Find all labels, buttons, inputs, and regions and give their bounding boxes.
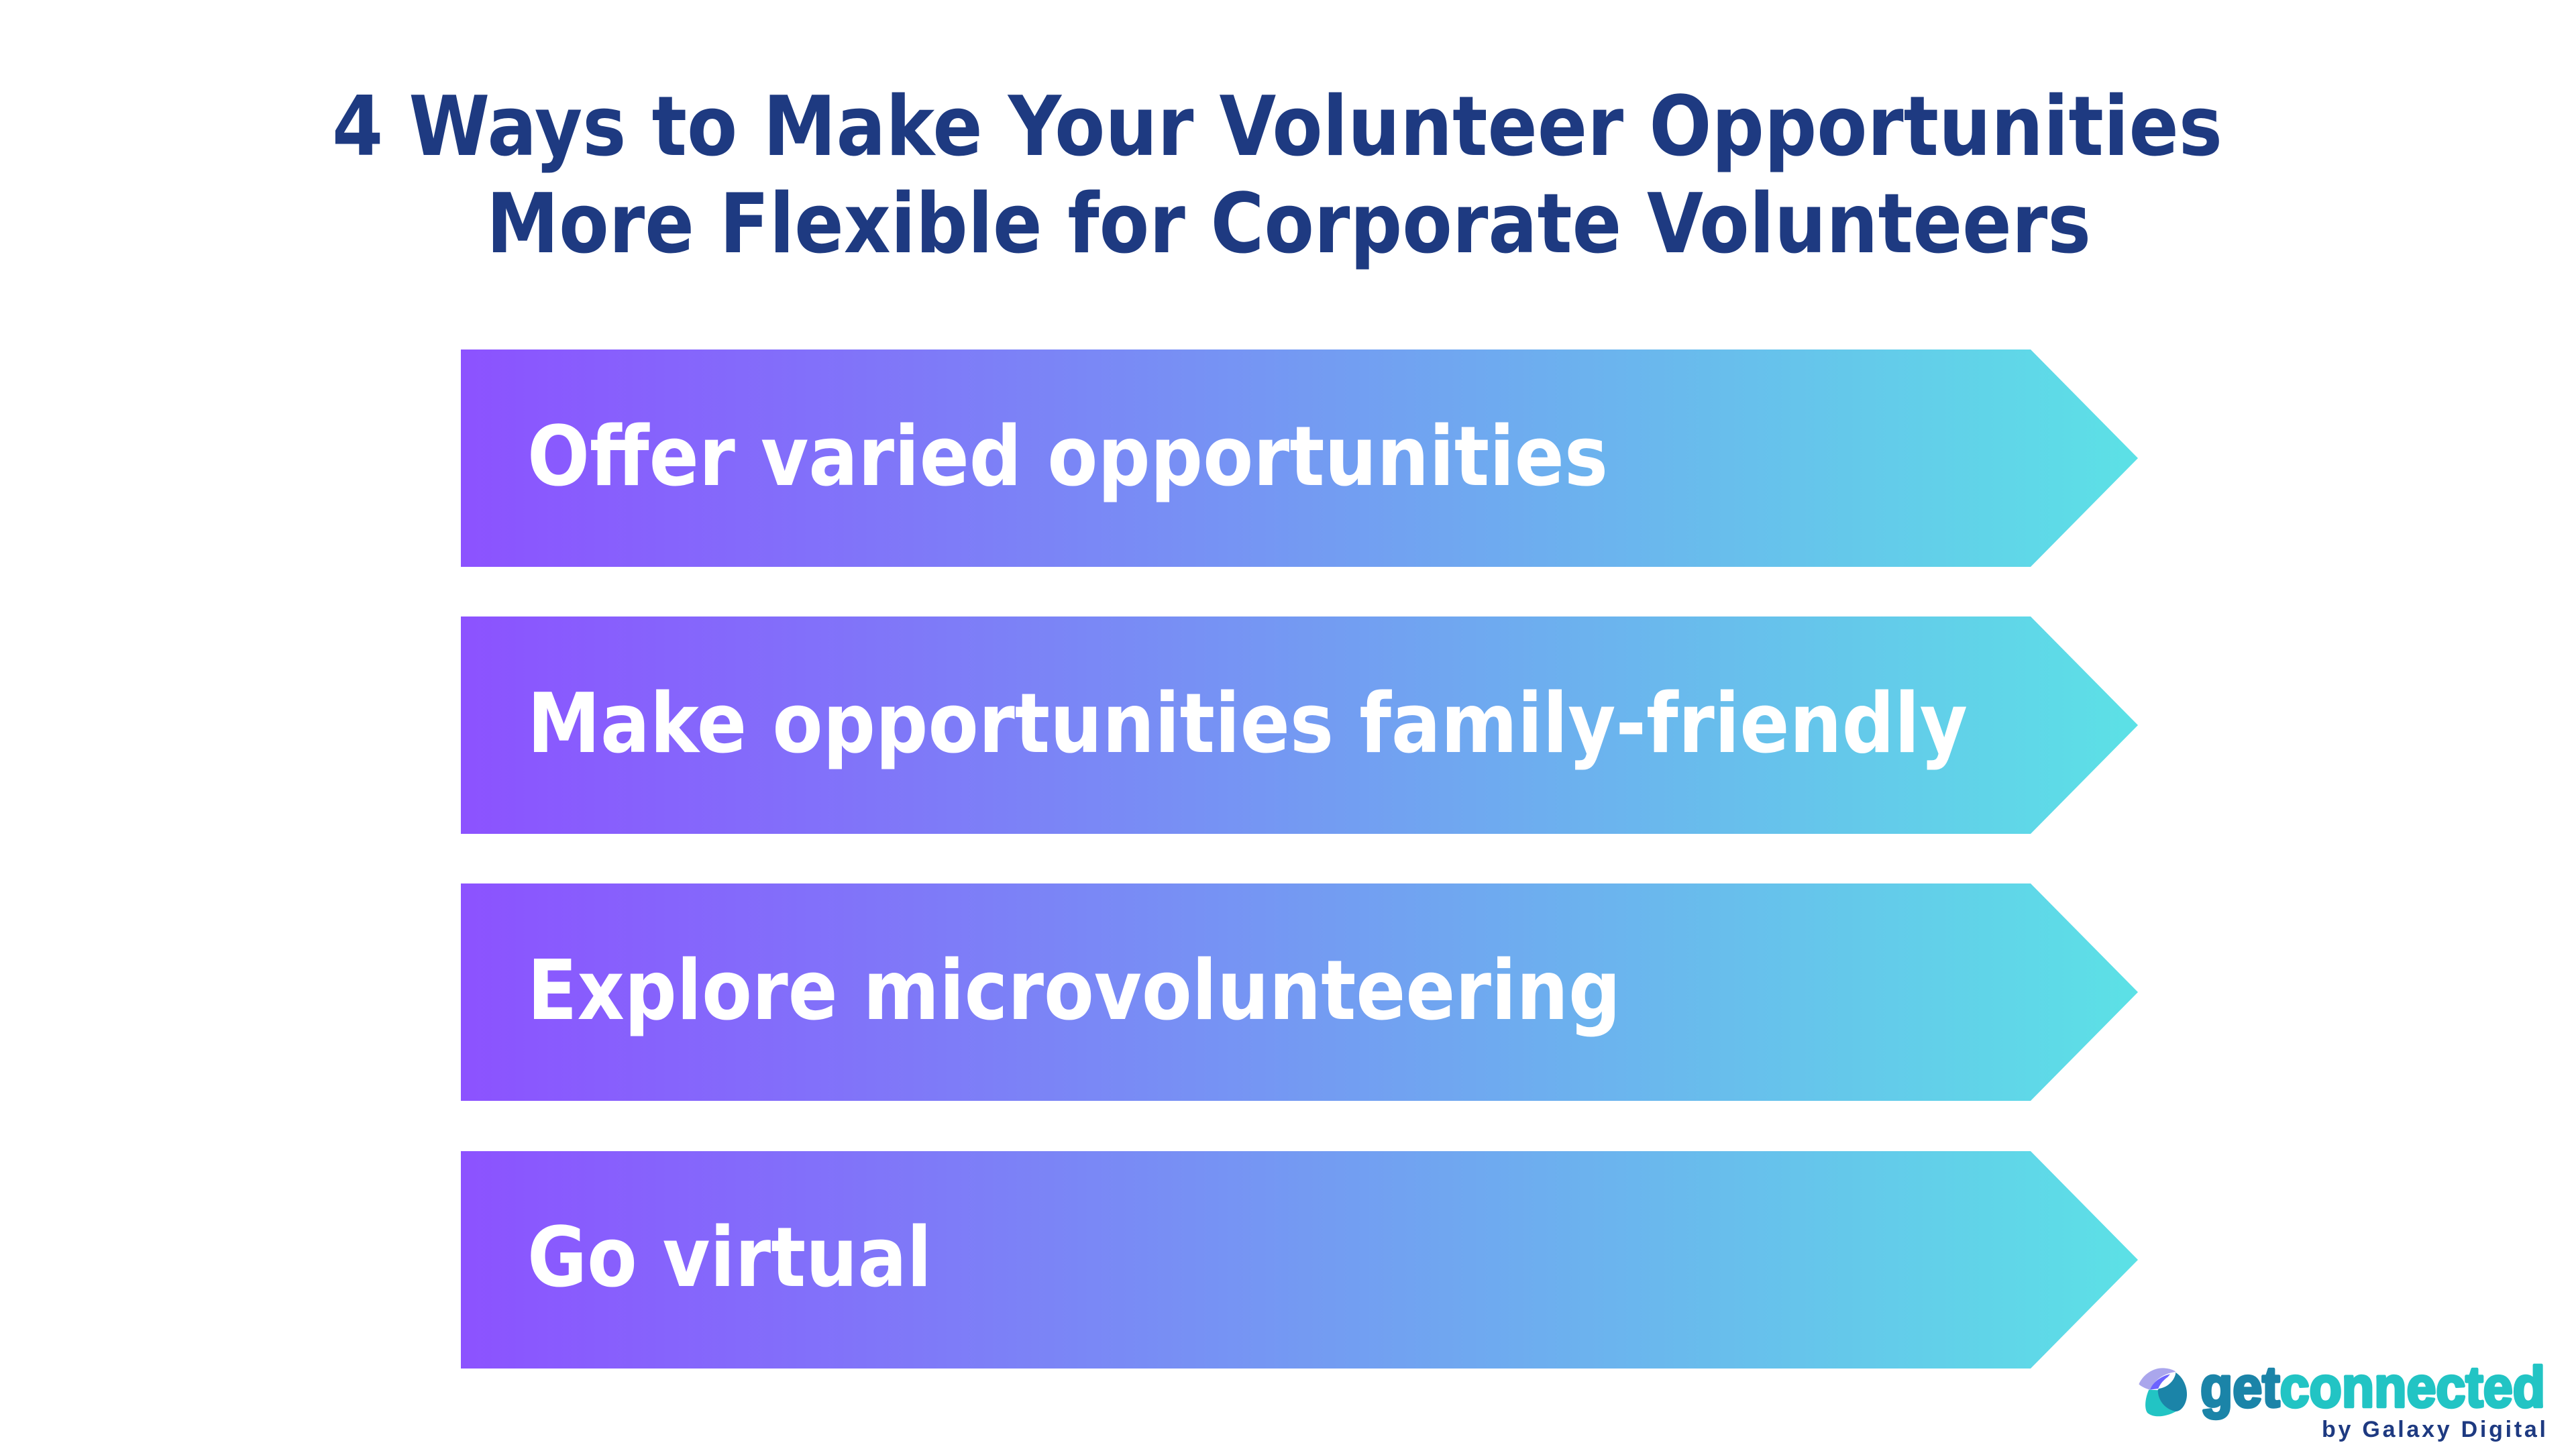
arrow panel: Offer varied opportunities: Offer varied opportunities [527, 409, 1608, 505]
arrow panel: Make opportunities family-friendly: Make opportunities family-friendly [527, 676, 1968, 772]
title: More Flexible for Corporate Volunteers [486, 176, 2091, 272]
arrow panel: Go virtual [461, 1151, 2138, 1368]
arrow panel: Explore microvolunteering [461, 883, 2138, 1101]
logo tagline: by Galaxy Digital [2322, 1417, 2546, 1442]
icon: logo mark [2139, 1368, 2187, 1416]
logo: getconnected by Galaxy Digital [2139, 1356, 2546, 1442]
logo wordmark: get connected [2200, 1356, 2545, 1419]
arrow panel: Explore microvolunteering: Explore microvolunteering [527, 943, 1621, 1039]
title [332, 79, 2222, 272]
title: 4 Ways to Make Your Volunteer Opportunities [332, 79, 2222, 175]
arrow panel: Go virtual: Go virtual [527, 1210, 932, 1306]
arrow panel: Offer varied opportunities [461, 350, 2138, 567]
arrow panel: Make opportunities family-friendly [461, 616, 2138, 834]
